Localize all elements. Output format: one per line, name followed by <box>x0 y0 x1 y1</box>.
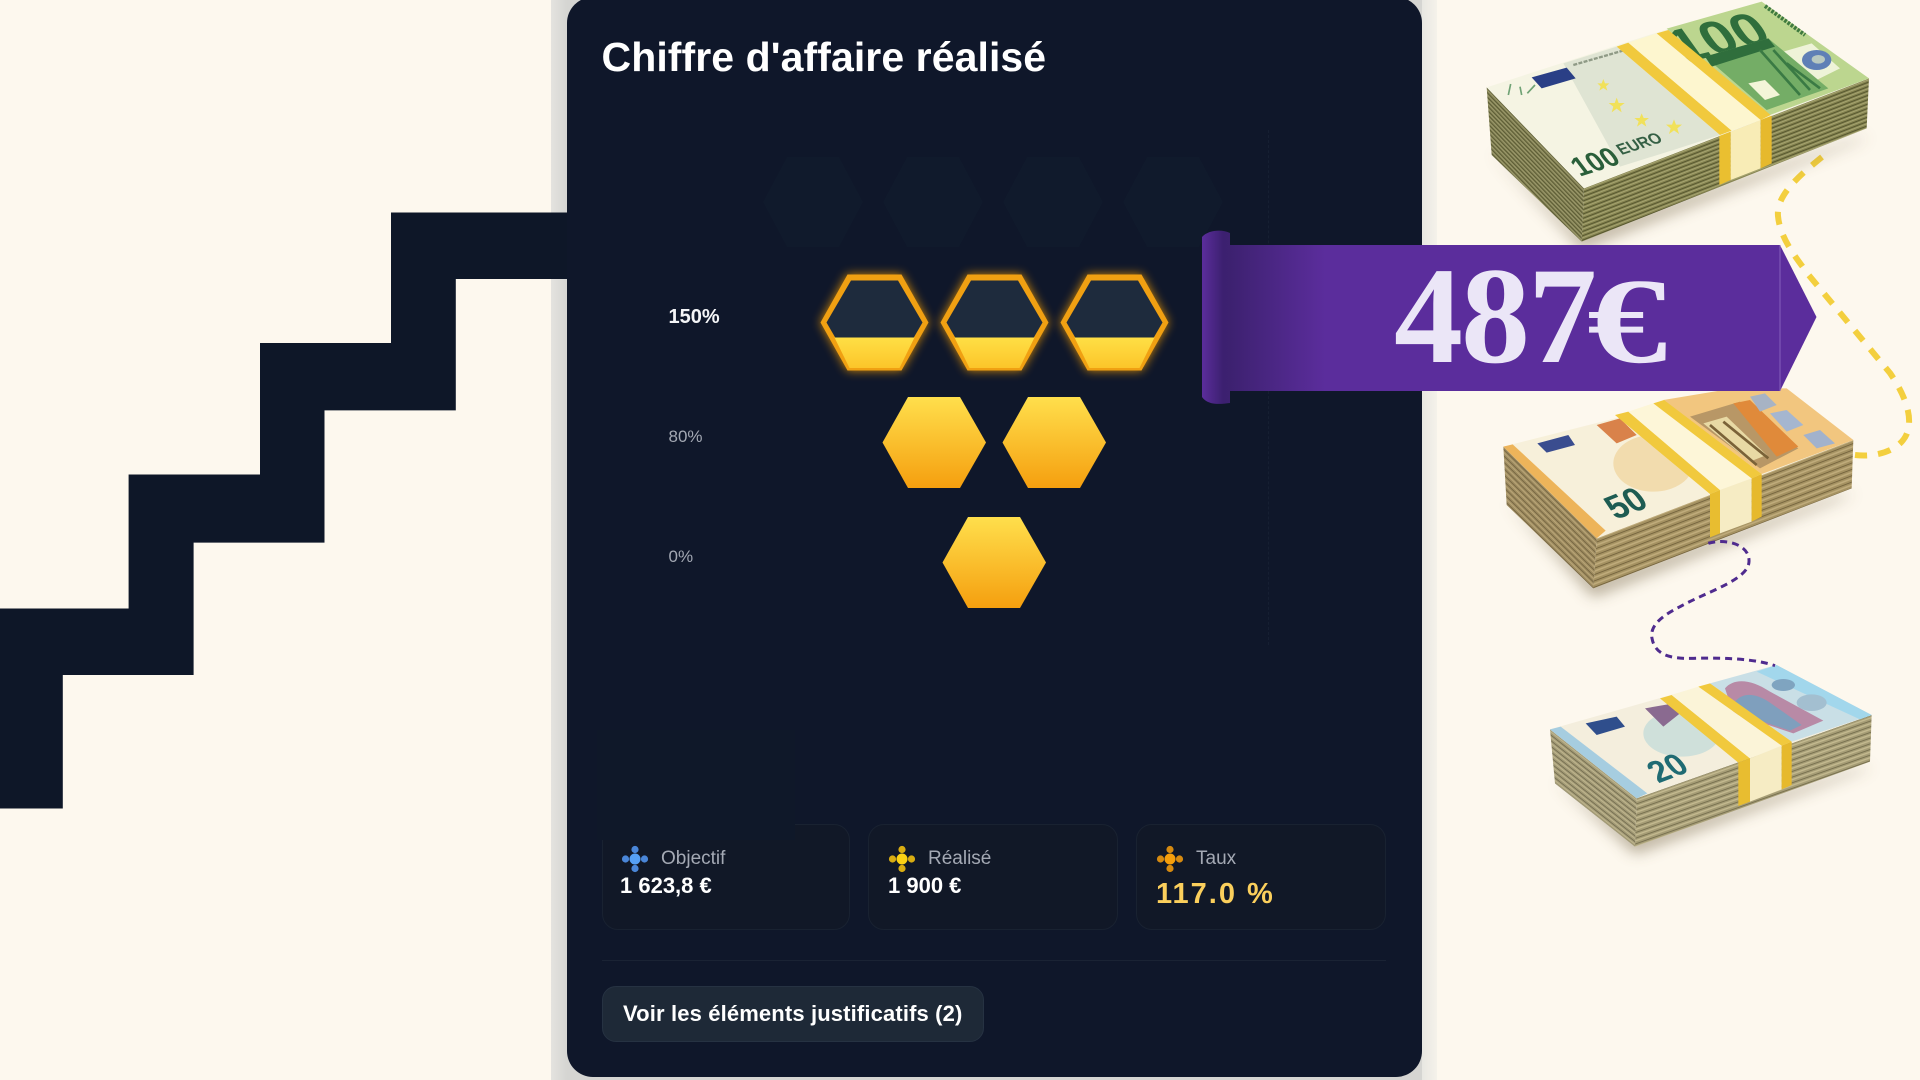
overlay patch <box>597 730 795 840</box>
label: 80%: 80% <box>668 427 703 446</box>
dashed path yellow <box>1778 157 1909 456</box>
stat card: realise <box>868 824 1118 930</box>
hexagon row 80% left <box>882 397 986 488</box>
banknote stack 50 euro <box>1503 388 1855 597</box>
icon: realise <box>888 846 916 872</box>
icon: taux <box>1156 846 1184 872</box>
label: 150%: 150% <box>668 306 720 328</box>
vertical dashed guide <box>1268 130 1269 645</box>
numeral 50: 50 <box>1597 480 1655 527</box>
hexagon row 0% <box>942 517 1046 608</box>
value: 1 900 € <box>888 873 961 898</box>
amount euro sign: € <box>1587 254 1668 388</box>
value: 1 623,8 € <box>620 873 712 898</box>
banknote stack 20 euro <box>1550 665 1873 853</box>
amount digits: 487 <box>1394 239 1595 392</box>
value: 117.0 % <box>1156 878 1275 910</box>
hexagon row 80% right <box>1002 397 1106 488</box>
label: Réalisé <box>928 848 991 869</box>
banknote stack 100 euro <box>1487 2 1870 248</box>
button <box>602 986 984 1042</box>
card shadow band <box>551 0 1437 1080</box>
numeral 100 small: 100 <box>1564 142 1627 183</box>
stat card: taux <box>1136 824 1386 930</box>
label: 0%: 0% <box>668 547 693 566</box>
staircase <box>0 212 567 808</box>
icon: objectif <box>622 846 648 872</box>
word EURO: EURO <box>1613 130 1667 158</box>
stat card: objectif <box>602 824 850 930</box>
divider <box>602 960 1386 961</box>
label: Objectif <box>661 848 725 869</box>
empty hexagons row <box>763 157 1223 247</box>
dashed path purple <box>1652 542 1775 666</box>
button label: Voir les éléments justificatifs (2) <box>623 1001 962 1026</box>
hexagon partially filled 2 <box>940 274 1048 370</box>
heading: Chiffre d'affaire réalisé <box>602 34 1046 80</box>
numeral 20: 20 <box>1639 747 1696 789</box>
hexagon partially filled 1 <box>820 274 928 370</box>
big numeral 100: 100 <box>1654 2 1781 73</box>
label: Taux <box>1196 848 1236 869</box>
panel: chiffre d'affaire <box>567 0 1422 1077</box>
hexagon partially filled 3 <box>1060 274 1168 370</box>
